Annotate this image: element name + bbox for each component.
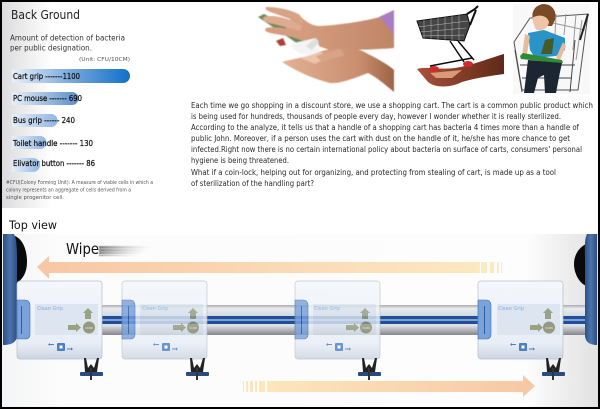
- bar: elevator button: Elivator button ------- 86: [13, 159, 95, 168]
- diagram background: [2, 234, 598, 407]
- right end grip: [585, 234, 597, 345]
- unit 2: clean grip lock (ghost): [122, 281, 207, 359]
- unit 3: clean grip lock (ghost): COIN: [362, 326, 370, 330]
- unit 1: clean grip lock: Clean Grip: [37, 306, 63, 312]
- bar: cart grip: Cart grip -------1100: [13, 72, 80, 81]
- unit 2: clean grip lock (ghost): COIN: [189, 326, 197, 330]
- body text: [191, 100, 593, 188]
- unit 3: clean grip lock (ghost): [295, 281, 380, 359]
- arrow: wipe left: [37, 256, 480, 279]
- chart subtitle: per public designation.: [10, 44, 92, 52]
- footnote: single progenitor cell.: [6, 195, 64, 201]
- unit 1: clean grip lock: COIN: [85, 326, 93, 330]
- unit 3: clean grip lock (ghost): Clean Grip: [314, 306, 340, 312]
- unit 1: clean grip lock: [17, 281, 102, 359]
- bar: cart grip: [12, 69, 130, 83]
- unit note: (Unit: CFU/10CM): [79, 57, 130, 63]
- motion streaks: [99, 246, 153, 256]
- unit 4 clamp: [542, 358, 565, 380]
- bar: PC mouse: [12, 92, 82, 105]
- body text: of sterilization of the handling part?: [191, 178, 314, 188]
- heading: Top view: Top view: [8, 218, 57, 232]
- bottle cap: [291, 38, 320, 56]
- unit 4: clean grip lock: Clean Grip: [498, 306, 524, 312]
- footnote: colony represents an aggregate of cells derived from a: [6, 188, 131, 194]
- arrow tail dashes: top: [481, 262, 502, 273]
- bar: bus grip: Bus grip ------ 240: [13, 116, 75, 125]
- heading: Back Ground: Back Ground: [11, 7, 80, 22]
- chart subtitle: Amount of detection of bacteria: [10, 34, 125, 42]
- photo: child in cart: [513, 4, 590, 94]
- bottle body: [258, 14, 318, 52]
- bar: toilet handle: [12, 136, 93, 149]
- body text: hygiene is being threatened.: [191, 155, 289, 165]
- footnote: #CFU(Colony Forming Unit): A measure of viable cells in which a: [6, 180, 153, 186]
- sleeve: [379, 10, 394, 35]
- left end grip: [3, 234, 17, 345]
- label: Wipe: Wipe: [66, 240, 99, 258]
- red nail: [276, 38, 286, 46]
- upper fingers: [266, 7, 304, 24]
- unit 2: clean grip lock (ghost): Clean Grip: [142, 306, 168, 312]
- unit 1 clamp: [80, 358, 103, 380]
- unit 4: clean grip lock: [478, 281, 563, 359]
- bar: toilet handle: Toilet handle ------- 130: [12, 139, 93, 148]
- unit 4: clean grip lock: COIN: [545, 326, 553, 330]
- upper arm and back of hand: [284, 14, 394, 50]
- unit 2 clamp: [186, 358, 209, 380]
- left panel shading: [2, 2, 52, 208]
- panel: bacteria chart: [6, 7, 153, 201]
- bar: elevator button: [12, 158, 95, 172]
- bar: PC mouse: PC mouse ------- 690: [13, 94, 82, 103]
- photo: cart on a hand: [417, 6, 504, 86]
- bar: bus grip: [12, 114, 75, 127]
- left wheel shadow: [15, 236, 27, 284]
- unit 3 clamp: [358, 358, 381, 380]
- arrow: wipe right: [267, 375, 535, 397]
- footnote: [6, 180, 153, 201]
- arrow tail dashes: bottom: [243, 381, 265, 392]
- chart subtitle: [10, 34, 125, 52]
- photo: hands with sanitizer: [258, 7, 394, 92]
- lower hand: [282, 48, 394, 92]
- panel: top view diagram: [2, 234, 598, 407]
- handle bar: [15, 305, 587, 335]
- right wheel shadow: [574, 244, 586, 286]
